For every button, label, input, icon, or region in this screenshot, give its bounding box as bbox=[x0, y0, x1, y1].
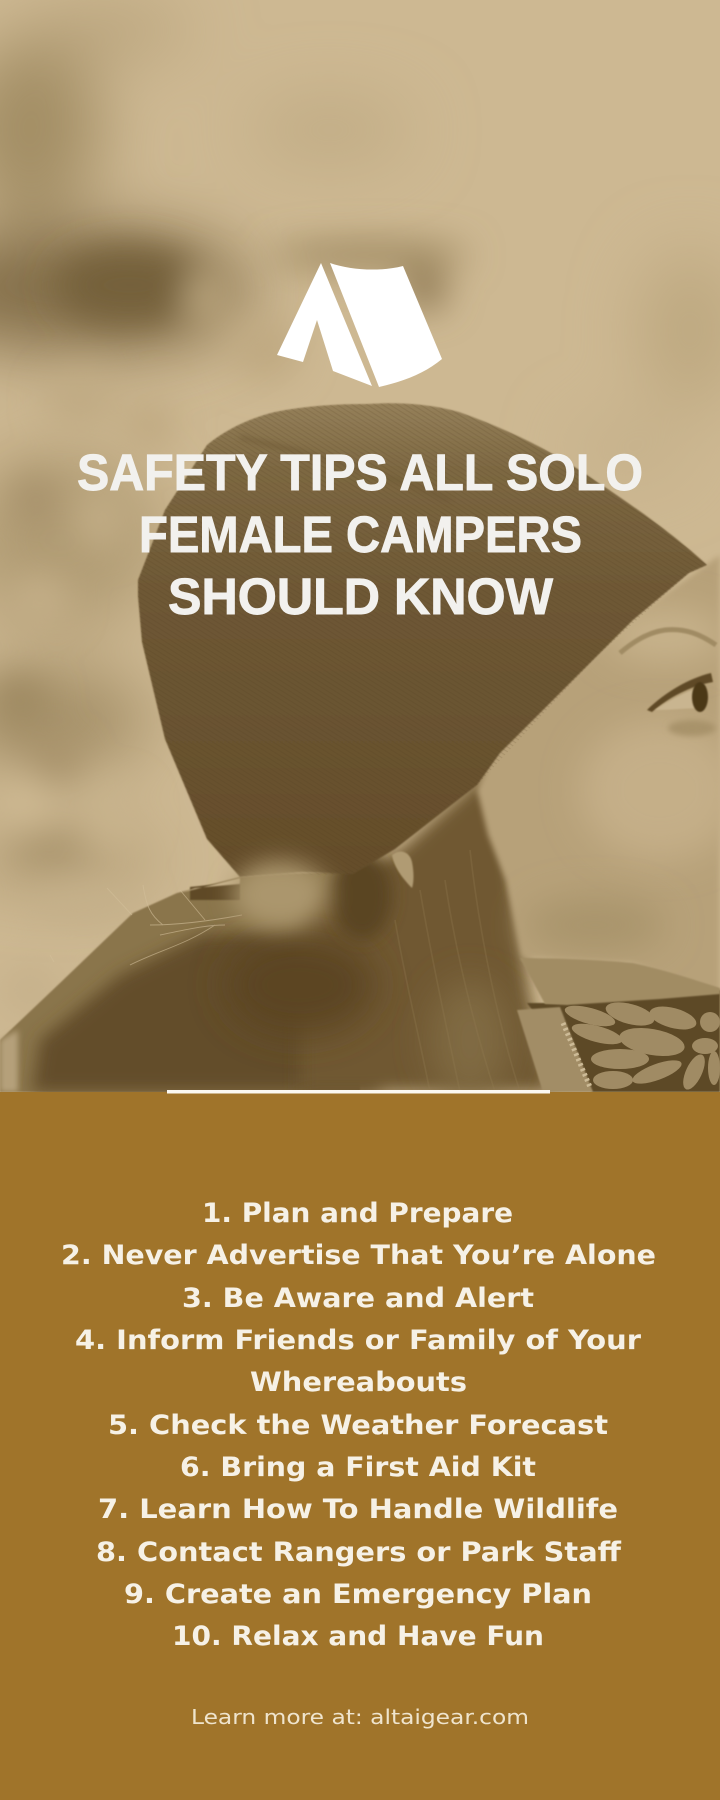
ear bbox=[392, 851, 414, 888]
numbered tips list: 5. Check the Weather Forecast bbox=[108, 1410, 608, 1441]
title: SAFETY TIPS ALL SOLO bbox=[77, 444, 643, 501]
numbered tips list: 4. Inform Friends or Family of Your bbox=[75, 1325, 642, 1356]
hair bbox=[242, 771, 552, 1092]
numbered tips list: 2. Never Advertise That You’re Alone bbox=[61, 1240, 656, 1271]
numbered tips list: 10. Relax and Have Fun bbox=[172, 1621, 544, 1652]
blurred forest background bbox=[0, 0, 720, 907]
jacket collar and zipper bbox=[517, 1007, 593, 1092]
numbered tips list: 7. Learn How To Handle Wildlife bbox=[98, 1494, 618, 1525]
numbered tips list bbox=[61, 1198, 656, 1652]
divider line bbox=[167, 1090, 550, 1094]
panel: brown list band bbox=[0, 1092, 720, 1800]
title bbox=[77, 444, 643, 625]
numbered tips list: 8. Contact Rangers or Park Staff bbox=[96, 1537, 622, 1568]
numbered tips list: 3. Be Aware and Alert bbox=[182, 1283, 534, 1314]
title: FEMALE CAMPERS bbox=[139, 506, 582, 563]
numbered tips list: Whereabouts bbox=[250, 1367, 467, 1398]
collar bbox=[190, 882, 240, 900]
footer source: Learn more at: altaigear.com bbox=[191, 1705, 529, 1729]
face bbox=[477, 555, 720, 1000]
numbered tips list: 6. Bring a First Aid Kit bbox=[180, 1452, 536, 1483]
numbered tips list: 1. Plan and Prepare bbox=[202, 1198, 513, 1229]
coat bbox=[0, 870, 380, 1092]
neck glow bbox=[232, 861, 328, 929]
patterned scarf bbox=[520, 958, 720, 1093]
title: SHOULD KNOW bbox=[168, 568, 554, 625]
eyebrow and eye bbox=[620, 630, 716, 736]
panel: sepia photo of woman in knit hat bbox=[0, 0, 720, 1100]
loose fibers bbox=[107, 885, 242, 966]
icon: tent bbox=[277, 263, 442, 387]
numbered tips list: 9. Create an Emergency Plan bbox=[124, 1579, 592, 1610]
knit hat bbox=[138, 403, 707, 877]
